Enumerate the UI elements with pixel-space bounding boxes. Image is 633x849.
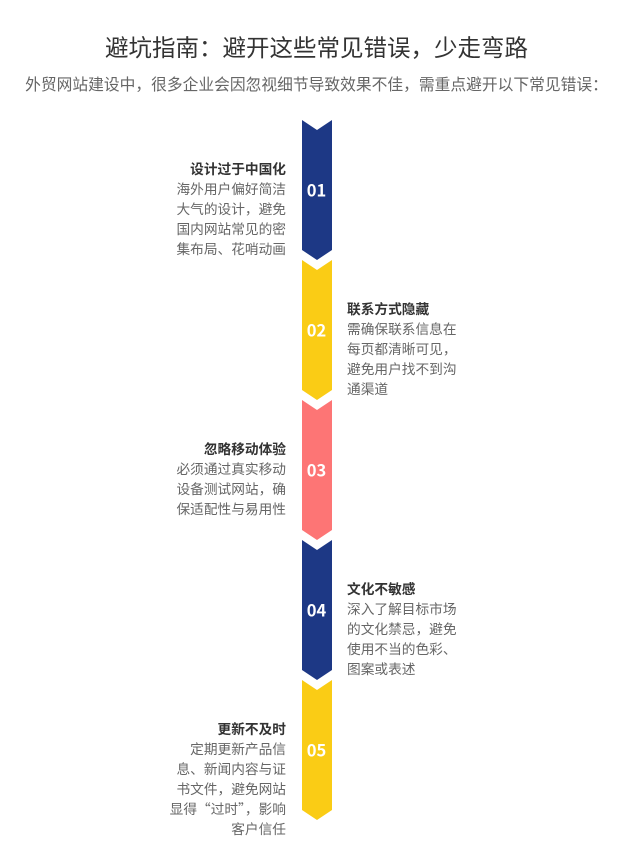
title: 避坑指南：避开这些常见错误，少走弯路: [105, 29, 528, 63]
text block 03: 保适配性与易用性: [176, 498, 286, 518]
chevron 04: 04: [307, 598, 326, 622]
subtitle: 外贸网站建设中，很多企业会因忽视细节导致效果不佳，需重点避开以下常见错误：: [25, 72, 608, 95]
chevron 05: [302, 680, 332, 820]
text block 01: 大气的设计，避免: [176, 198, 286, 218]
text block 04: 的文化禁忌，避免: [347, 618, 457, 638]
text block 05: 定期更新产品信: [190, 738, 286, 758]
text block 05: 显得“过时”，影响: [170, 798, 286, 818]
text block 04: 使用不当的色彩、: [347, 638, 457, 658]
chevron 03: [302, 400, 332, 540]
text block 03: [176, 438, 286, 518]
text block 05: 更新不及时: [218, 718, 286, 738]
text block 02: 每页都清晰可见，: [347, 338, 457, 358]
text block 04: 深入了解目标市场: [347, 598, 457, 618]
chevron 03: 03: [307, 458, 326, 482]
text block 04: 图案或表述: [347, 658, 415, 678]
text block 02: 联系方式隐藏: [347, 298, 429, 318]
text block 04: [347, 578, 457, 678]
text block 01: 设计过于中国化: [190, 158, 286, 178]
text block 02: [347, 298, 457, 398]
chevron 02: 02: [307, 318, 326, 342]
text block 05: 客户信任: [231, 818, 286, 838]
text block 03: 设备测试网站，确: [176, 478, 286, 498]
text block 05: [170, 718, 286, 838]
text block 05: 书文件，避免网站: [176, 778, 286, 798]
chevron 04: [302, 540, 332, 680]
text block 03: 忽略移动体验: [204, 438, 286, 458]
chevron 05: 05: [307, 738, 326, 762]
text block 02: 需确保联系信息在: [347, 318, 457, 338]
text block 03: 必须通过真实移动: [176, 458, 286, 478]
chevron 01: [302, 120, 332, 260]
text block 01: 国内网站常见的密: [176, 218, 286, 238]
text block 02: 避免用户找不到沟: [347, 358, 457, 378]
text block 01: 海外用户偏好简洁: [176, 178, 286, 198]
chevron 01: 01: [307, 178, 326, 202]
text block 01: 集布局、花哨动画: [176, 238, 286, 258]
chevron 02: [302, 260, 332, 400]
text block 02: 通渠道: [347, 378, 388, 398]
text block 01: [176, 158, 286, 258]
text block 05: 息、新闻内容与证: [176, 758, 286, 778]
text block 04: 文化不敏感: [347, 578, 415, 598]
